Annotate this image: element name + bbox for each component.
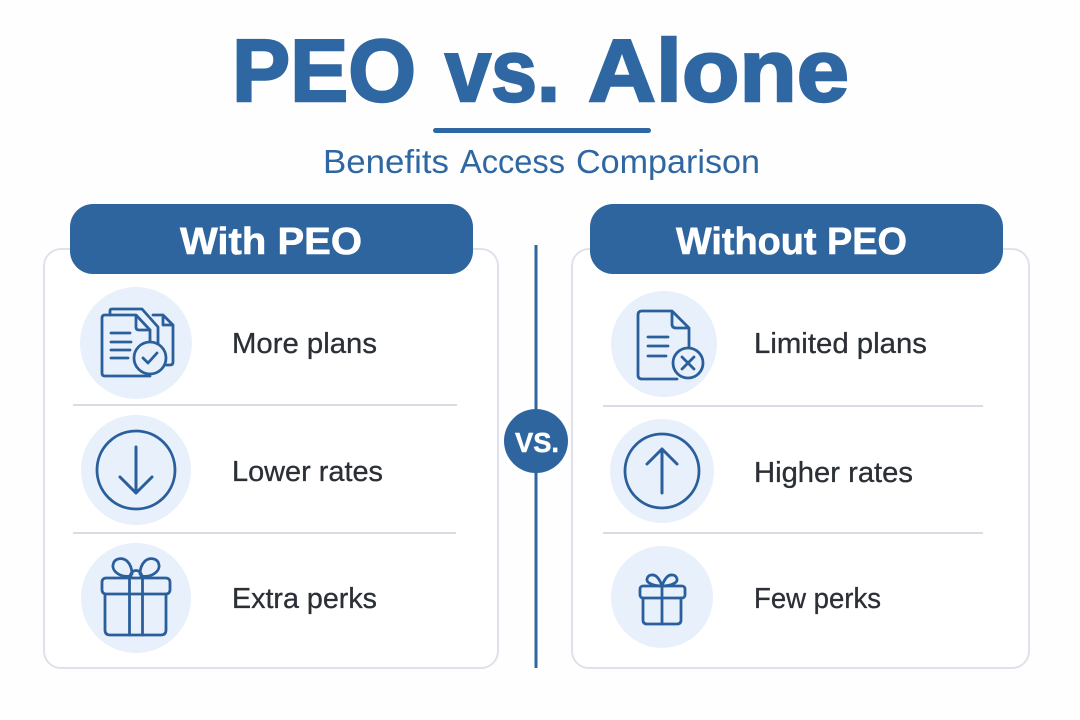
center divider line (534, 245, 538, 668)
label: higher rates: Higher rates (754, 457, 913, 489)
icon: large gift (81, 543, 191, 653)
subtitle: Comparison (576, 143, 760, 180)
vs badge (504, 409, 568, 473)
icon: down arrow (81, 415, 191, 525)
panel: with PEO (44, 204, 498, 668)
header: without PEO (590, 204, 1003, 274)
label: more plans: More plans (232, 328, 377, 360)
label: limited plans: Limited plans (754, 328, 927, 360)
card: without PEO (572, 249, 1029, 668)
title underline (433, 128, 651, 133)
subtitle (323, 143, 760, 180)
title: vs. (445, 21, 560, 120)
icon: small gift (611, 546, 713, 648)
subtitle: Benefits (323, 143, 449, 180)
icon: up arrow (610, 419, 714, 523)
title (232, 21, 849, 120)
card: with PEO (44, 249, 498, 668)
icon: document with x (611, 291, 717, 397)
label: few perks: Few perks (754, 583, 881, 615)
title: Alone (588, 21, 849, 120)
title: PEO (232, 21, 416, 120)
icon: documents with check (80, 287, 192, 399)
vs badge: VS. (515, 427, 559, 458)
subtitle: Access (460, 143, 565, 180)
label: extra perks: Extra perks (232, 583, 377, 615)
panel: without PEO (572, 204, 1029, 668)
header: with PEO: With PEO (180, 221, 362, 263)
header: without PEO: Without PEO (676, 221, 907, 263)
header: with PEO (70, 204, 473, 274)
label: lower rates: Lower rates (232, 456, 383, 488)
